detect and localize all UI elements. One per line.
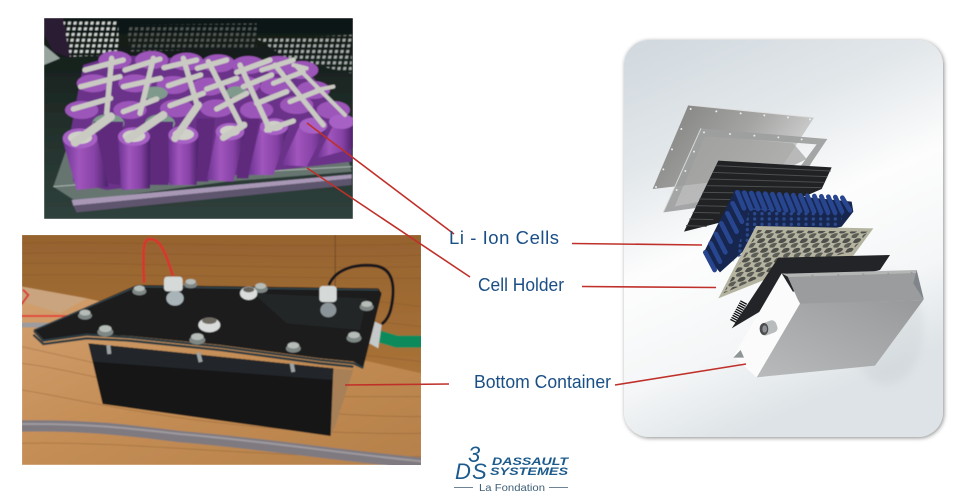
logo: Dassault Systemes La Fondation: SYSTEMES [490,466,569,478]
label: Cell Holder: Cell Holder [478,275,564,295]
black thermal sheet [732,255,890,328]
grey hose [22,426,422,463]
photo: assembled module on wooden table [22,235,423,465]
acrylic cell holder plate [52,151,352,213]
bottom container [88,343,353,436]
purple cylindrical cells, massed body [69,55,352,190]
logo: Dassault Systemes La Fondation: La Fondation [479,482,545,494]
logo: Dassault Systemes La Fondation [454,442,570,494]
frame gasket [663,128,827,212]
nickel strips [73,58,345,142]
cell tops, back rows [65,51,350,185]
label: Li-Ion Cells: Li - Ion Cells [449,227,559,248]
blue battery cells [703,190,853,272]
top plate [653,105,814,189]
photo: battery cells in holder [44,18,354,219]
panel: exploded CAD view [624,40,943,437]
leader lines [307,123,746,385]
logo: Dassault Systemes La Fondation: DASSAULT [492,456,570,468]
purple cylindrical cells, front row [63,114,354,190]
bottom container [733,270,924,377]
outlet connector [758,319,779,337]
label: Bottom Container: Bottom Container [474,372,611,392]
logo: Dassault Systemes La Fondation: S [472,459,487,484]
perforated cell holder [718,226,873,298]
wires [22,239,423,342]
connector [369,322,382,348]
bolts and terminals [78,277,374,372]
lid [33,285,382,368]
finned black plate [684,161,832,232]
logo: Dassault Systemes La Fondation: 3 [468,442,481,467]
logo: Dassault Systemes La Fondation: D [455,459,471,484]
